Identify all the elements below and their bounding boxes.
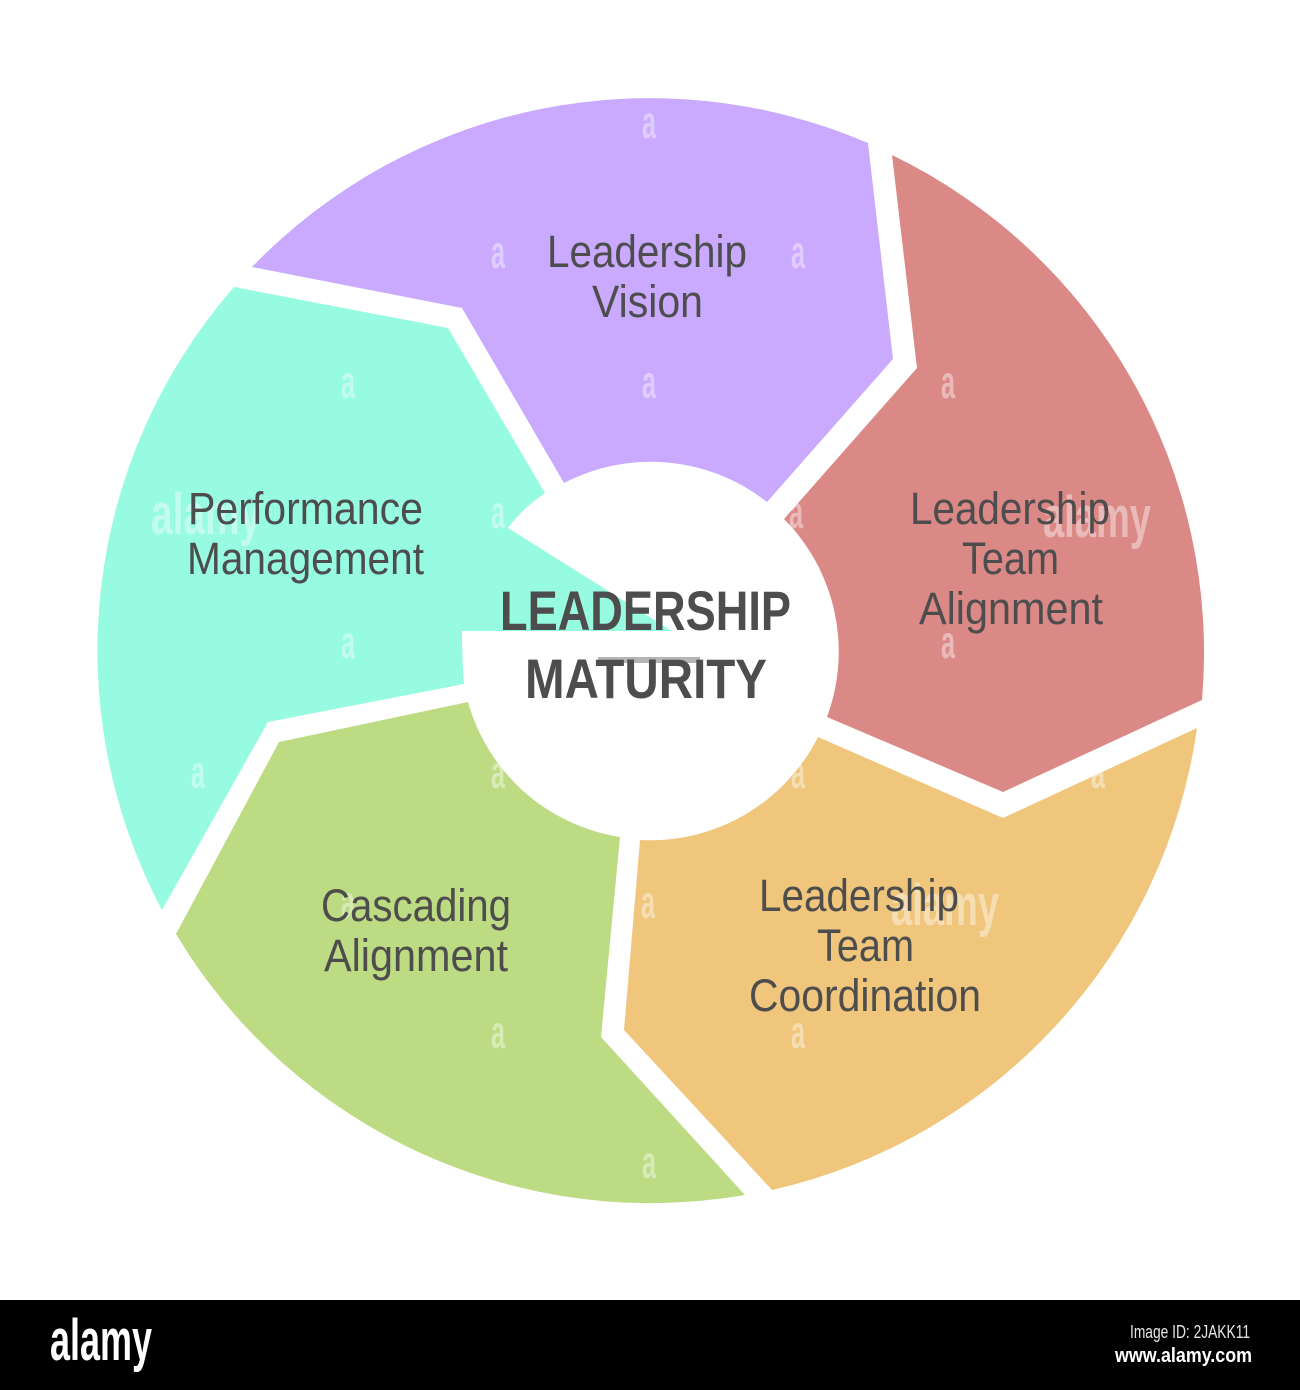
label: cascading alignment: Cascading xyxy=(321,880,511,931)
watermark marks: a xyxy=(341,356,355,408)
watermark marks: a xyxy=(341,616,355,668)
label: leadership vision: Vision xyxy=(592,276,703,327)
segment: cascading alignment xyxy=(176,702,745,1203)
watermark marks: a xyxy=(341,876,355,928)
segment: leadership vision xyxy=(252,98,893,502)
center title xyxy=(500,579,791,710)
watermark marks: a xyxy=(642,356,656,408)
center watermark band xyxy=(598,657,700,663)
watermark marks: a xyxy=(641,876,655,928)
footer logo: alamy xyxy=(50,1308,152,1373)
watermark marks: a xyxy=(941,356,955,408)
label: leadership team alignment: Team xyxy=(962,533,1059,584)
center title: LEADERSHIP xyxy=(500,579,791,642)
watermark marks: a xyxy=(791,1006,805,1058)
watermark marks: a xyxy=(491,226,505,278)
label: leadership team alignment xyxy=(910,483,1110,634)
label: cascading alignment xyxy=(321,880,511,981)
label: leadership team coordination: Team xyxy=(817,920,914,971)
watermark marks: a xyxy=(491,486,505,538)
center title: MATURITY xyxy=(525,647,767,710)
watermark marks: a xyxy=(491,746,505,798)
footer bar xyxy=(0,1300,1300,1390)
label: performance management: Management xyxy=(187,533,424,584)
website: www.alamy.com xyxy=(1114,1345,1252,1367)
watermark marks: a xyxy=(791,226,805,278)
watermark marks: a xyxy=(1091,746,1105,798)
watermark marks: a xyxy=(789,486,803,538)
watermark marks: a xyxy=(642,96,656,148)
watermark marks: alamy xyxy=(1043,485,1151,550)
segment: leadership team coordination xyxy=(624,728,1197,1190)
label: performance management: Performance xyxy=(188,483,423,534)
watermark marks: a xyxy=(642,1136,656,1188)
label: leadership vision xyxy=(547,226,747,327)
label: leadership team coordination xyxy=(749,870,981,1021)
watermark marks: a xyxy=(791,746,805,798)
label: leadership team coordination: Coordination xyxy=(749,970,981,1021)
segment: performance management xyxy=(97,287,672,910)
image id: Image ID: 2JAKK11 xyxy=(1130,1322,1250,1342)
label: leadership team coordination: Leadership xyxy=(759,870,959,921)
label: leadership vision: Leadership xyxy=(547,226,747,277)
watermark marks: a xyxy=(191,746,205,798)
label: performance management xyxy=(187,483,424,584)
watermark marks: alamy xyxy=(151,482,261,547)
watermark marks: alamy xyxy=(891,873,999,938)
watermark marks xyxy=(151,96,1151,1188)
label: leadership team alignment: Alignment xyxy=(919,583,1103,634)
segment: leadership team alignment xyxy=(784,155,1204,792)
watermark marks: a xyxy=(941,616,955,668)
label: cascading alignment: Alignment xyxy=(324,930,508,981)
label: leadership team alignment: Leadership xyxy=(910,483,1110,534)
watermark marks: a xyxy=(491,1006,505,1058)
